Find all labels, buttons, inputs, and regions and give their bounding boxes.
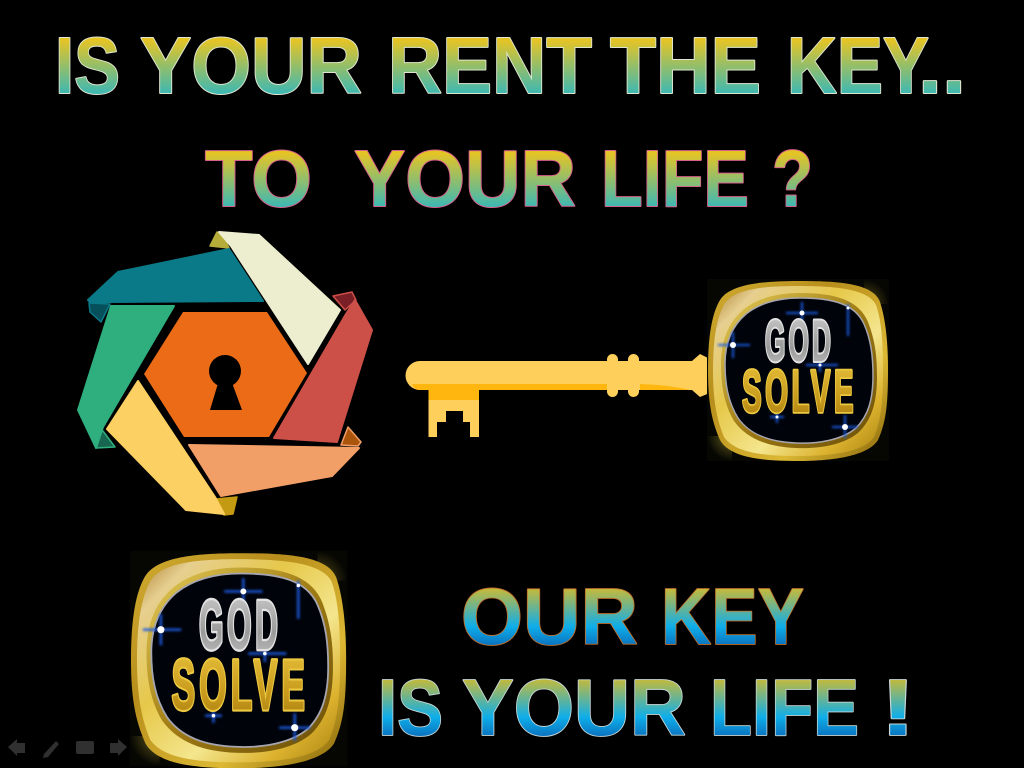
heading: our key: KEY [661,572,804,661]
sparkle glow [718,302,858,438]
heading: our key [461,572,804,661]
hexagon with keyhole [144,312,307,437]
title: is your rent the key [55,21,966,110]
badge: god solve (key bow): GOD [765,309,834,374]
subtitle: to your life: ? [772,134,813,223]
ribbon: red [274,300,372,442]
key shaft shadow [412,384,690,390]
heading: is your life: YOUR [462,663,686,752]
ribbon: teal [88,249,263,302]
inner rim [147,568,333,753]
icon: back arrow [8,739,25,756]
ribbon: peach [189,445,359,496]
dark face [725,298,873,443]
sparkle glow [143,578,310,741]
slideshow controls [8,739,127,758]
corner glow [130,551,347,766]
subtitle: to your life [205,134,813,223]
sparkles [718,302,858,438]
keyhole [209,355,242,410]
heading: is your life: LIFE [710,663,859,752]
ribbon fold shadows [89,232,361,515]
icon: menu [76,741,94,754]
icon: pen [43,741,59,758]
badge: god solve (key bow): SOLVE [742,358,857,425]
title: is your rent the key: IS [55,21,120,110]
icon: ribbon hexagon lock [78,232,372,515]
heading: is your life: ! [880,663,916,752]
subtitle: to your life: LIFE [601,134,749,223]
gold frame [131,553,346,768]
ribbon: cream [219,232,340,364]
corner glow [707,279,889,461]
inner rim [721,293,877,448]
key collars [607,354,712,397]
gold frame [708,281,888,461]
badge: god solve (bottom): GOD [199,586,282,664]
key shaft [406,361,710,390]
ribbon: yellow [107,381,224,514]
title: is your rent the key: .. [918,21,966,110]
heading: our key: OUR [461,572,638,661]
key bit [428,390,479,437]
badge: god solve (bottom): SOLVE [172,646,309,726]
title: is your rent the key: KEY [787,21,929,110]
title: is your rent the key: YOUR [140,21,362,110]
title: is your rent the key: THE [610,21,761,110]
subtitle: to your life: YOUR [354,134,576,223]
heading: is your life: IS [378,663,443,752]
sparkle cores [157,584,300,731]
key bit shadow [428,390,479,400]
badge: god solve (bottom) [130,551,347,768]
sparkle cores [730,306,850,430]
badge: god solve (key bow) [707,279,889,461]
ribbon: green [78,306,174,448]
title: is your rent the key: RENT [388,21,592,110]
dark face [151,574,328,747]
icon: forward arrow [110,739,127,756]
heading: is your life [378,663,916,752]
sparkles [143,578,310,741]
key [406,354,712,437]
subtitle: to your life: TO [205,134,312,223]
